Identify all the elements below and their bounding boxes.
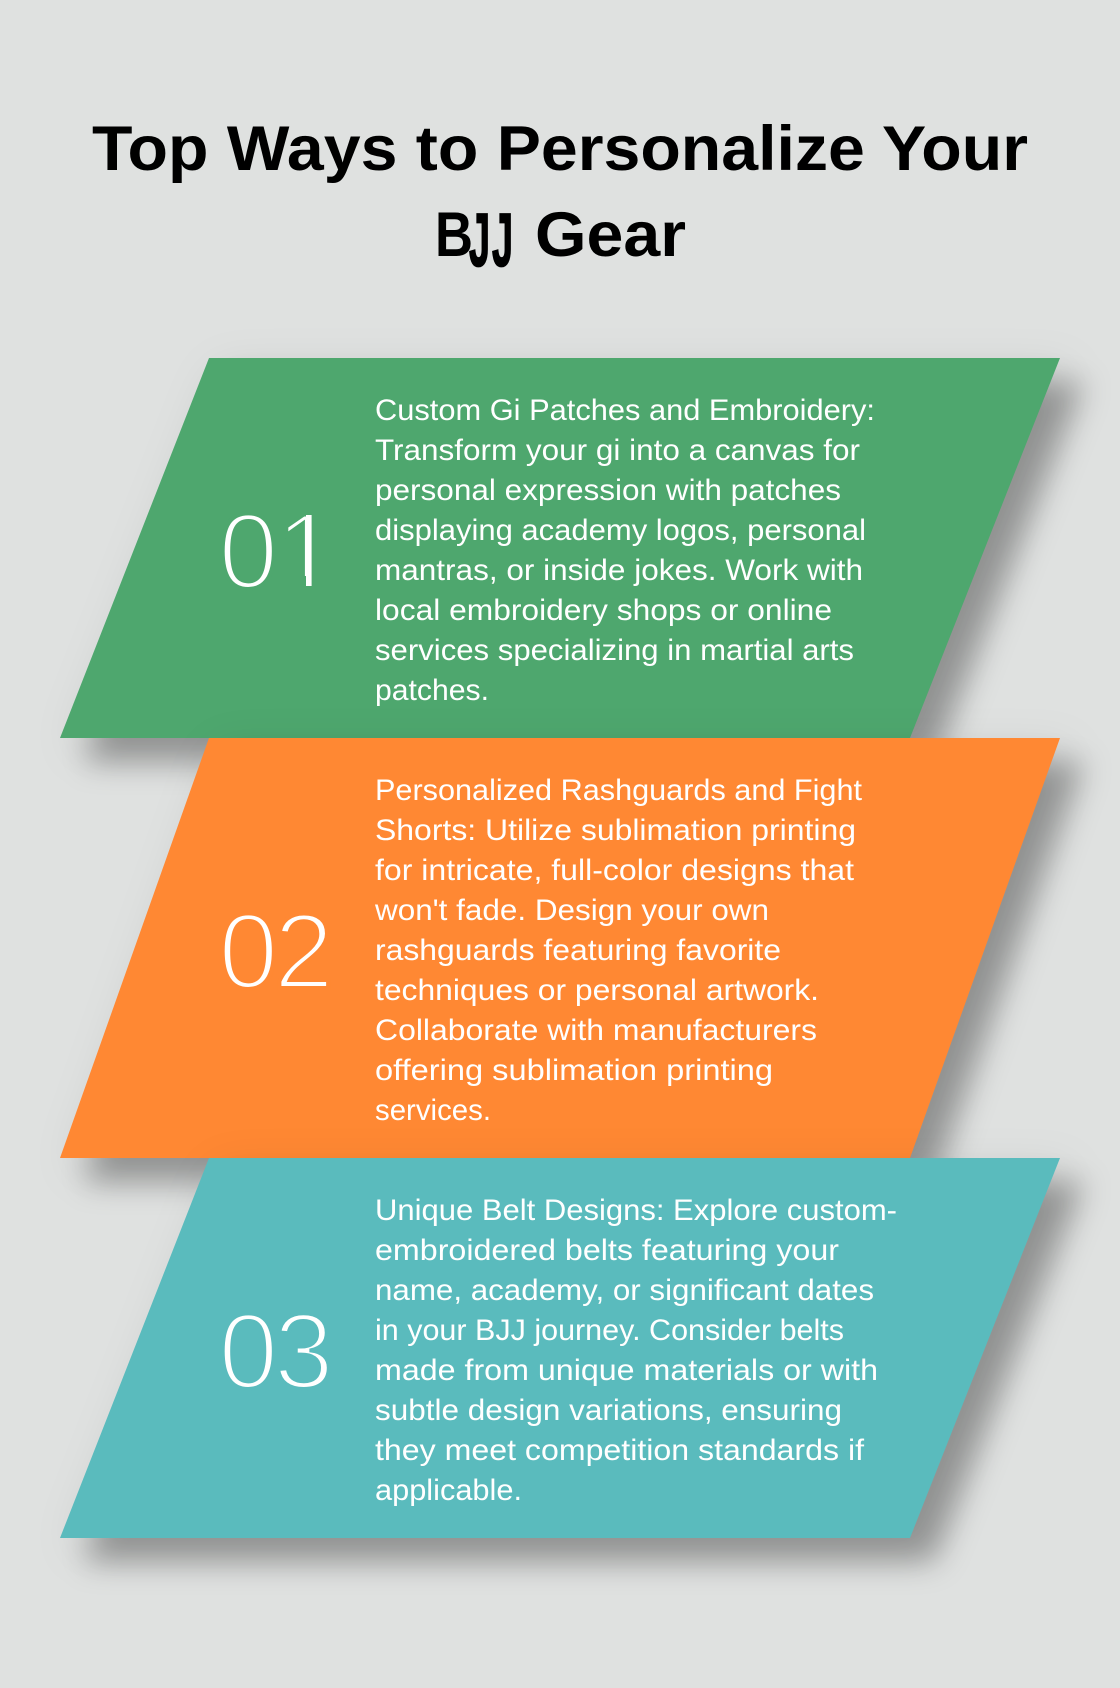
text: unique belt designs: in your BJJ journey. Consider belts <box>375 1314 844 1347</box>
text: unique belt designs <box>375 1194 897 1507</box>
text: personalized rashguards and fight shorts: offering sublimation printing <box>375 1054 773 1087</box>
title: Gear <box>535 200 686 270</box>
panel: step 02 rashguards and fight shorts <box>60 738 1060 1158</box>
text: custom gi patches and embroidery: personal expression with patches <box>375 474 841 507</box>
text: personalized rashguards and fight shorts: services. <box>375 1094 491 1127</box>
text: custom gi patches and embroidery: Transform your gi into a canvas for <box>375 434 860 467</box>
text: custom gi patches and embroidery: Custom Gi Patches and Embroidery: <box>375 394 875 427</box>
title: J <box>469 198 490 282</box>
green parallelogram <box>60 358 1060 738</box>
text: unique belt designs: made from unique materials or with <box>375 1354 878 1387</box>
text: unique belt designs: Unique Belt Designs: Explore custom- <box>375 1194 897 1227</box>
number 02: 02 <box>218 891 334 1011</box>
text: personalized rashguards and fight shorts <box>374 774 863 1127</box>
panel: step 03 unique belt designs <box>60 1158 1060 1538</box>
text: personalized rashguards and fight shorts: won't fade. Design your own <box>374 894 769 927</box>
number 03: 03 <box>218 1291 334 1411</box>
number 01: 01 <box>218 491 336 611</box>
text: personalized rashguards and fight shorts: Collaborate with manufacturers <box>375 1014 817 1047</box>
text: unique belt designs: applicable. <box>375 1474 522 1507</box>
text: unique belt designs: name, academy, or significant dates <box>375 1274 874 1307</box>
text: personalized rashguards and fight shorts: techniques or personal artwork. <box>375 974 819 1007</box>
title: B <box>435 200 473 270</box>
text: custom gi patches and embroidery: local embroidery shops or online <box>375 594 832 627</box>
orange parallelogram <box>60 738 1060 1158</box>
text: custom gi patches and embroidery: displaying academy logos, personal <box>375 514 866 547</box>
text: custom gi patches and embroidery: patches. <box>375 674 489 707</box>
text: custom gi patches and embroidery: mantras, or inside jokes. Work with <box>375 554 863 587</box>
text: personalized rashguards and fight shorts: for intricate, full-color designs that <box>375 854 855 887</box>
text: personalized rashguards and fight shorts: rashguards featuring favorite <box>375 934 781 967</box>
panel: step 01 custom gi patches <box>60 358 1060 738</box>
text: custom gi patches and embroidery <box>375 394 875 707</box>
title: J <box>492 198 513 282</box>
text: personalized rashguards and fight shorts: Personalized Rashguards and Fight <box>375 774 863 807</box>
text: unique belt designs: subtle design variations, ensuring <box>375 1394 842 1427</box>
title <box>92 114 1028 282</box>
title: Top Ways to Personalize Your <box>92 114 1028 184</box>
text: personalized rashguards and fight shorts: Shorts: Utilize sublimation printing <box>375 814 856 847</box>
teal parallelogram <box>60 1158 1060 1538</box>
text: custom gi patches and embroidery: services specializing in martial arts <box>375 634 854 667</box>
text: unique belt designs: embroidered belts featuring your <box>375 1234 839 1267</box>
text: unique belt designs: they meet competition standards if <box>375 1434 865 1467</box>
